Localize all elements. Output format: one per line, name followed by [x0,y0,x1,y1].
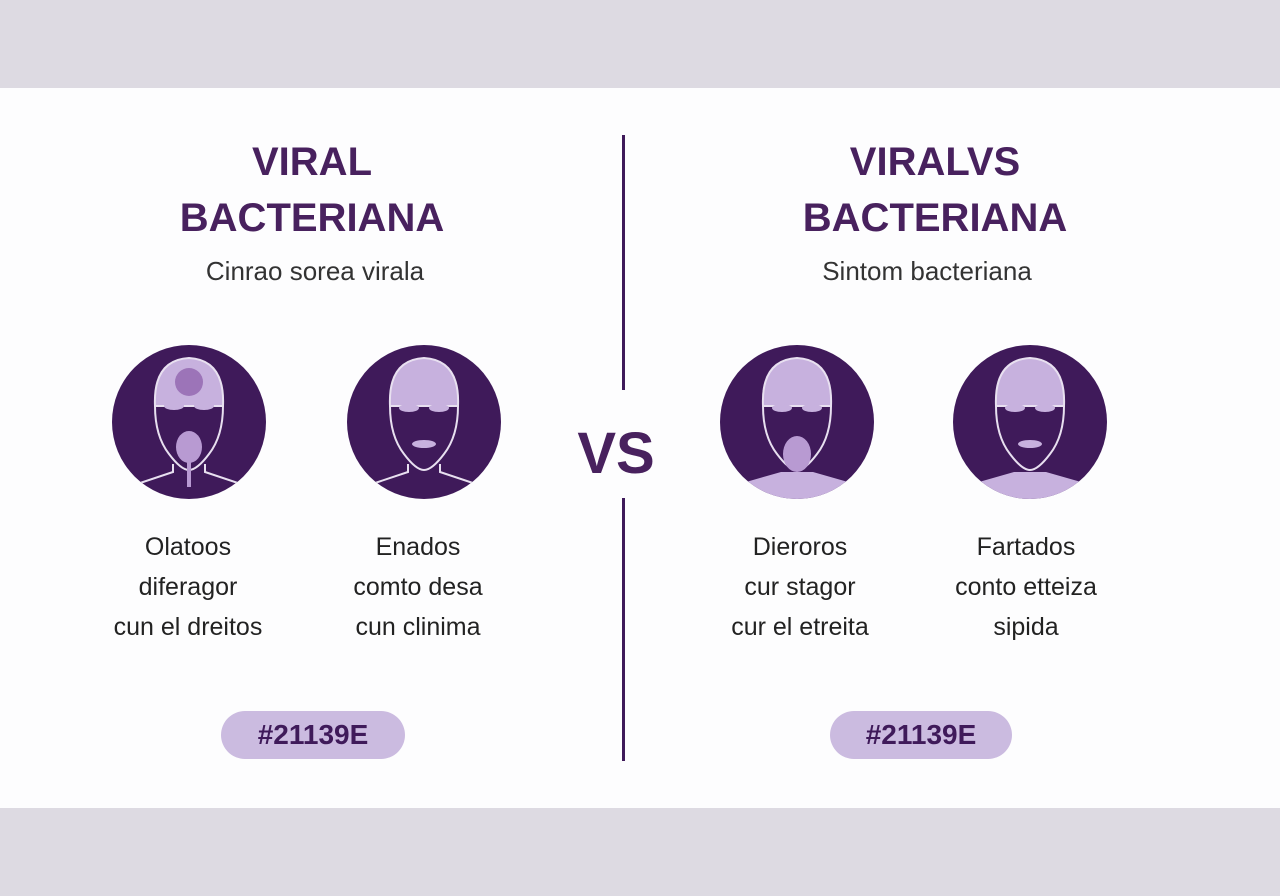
text block 2: comto desa [353,573,483,601]
pill right [830,711,1012,759]
text block 4 [955,533,1097,641]
subtitle right: Sintom bacteriana [822,256,1032,286]
divider [622,135,625,390]
title right: VIRALVS [850,140,1020,184]
text block 3 [731,533,869,641]
text block 4: conto etteiza [955,573,1097,601]
title left [180,140,444,240]
pill left: #21139E [258,719,368,750]
icon: bacterial face 2 [953,345,1107,499]
text block 2: Enados [376,533,460,561]
text block 2 [353,533,483,641]
title left: VIRAL [252,140,372,184]
icon: viral face 1 [112,345,266,499]
vs label: VS [577,421,655,486]
pill right: #21139E [866,719,976,750]
text block 4: Fartados [977,533,1075,561]
text block 3: cur el etreita [731,613,869,641]
title right: BACTERIANA [803,196,1067,240]
text block 3: Dieroros [753,533,847,561]
pill left [221,711,405,759]
title left: BACTERIANA [180,196,444,240]
text block 2: cun clinima [355,613,481,641]
text block 1: diferagor [139,573,237,601]
subtitle left: Cinrao sorea virala [206,256,424,286]
text block 4: sipida [993,613,1059,641]
text block 1: cun el dreitos [114,613,262,641]
icon: face 2 [347,345,501,499]
text block 1: Olatoos [145,533,231,561]
text block 1 [114,533,262,641]
title right [803,140,1067,240]
text block 3: cur stagor [744,573,856,601]
icon: bacterial face 1 [720,345,874,499]
